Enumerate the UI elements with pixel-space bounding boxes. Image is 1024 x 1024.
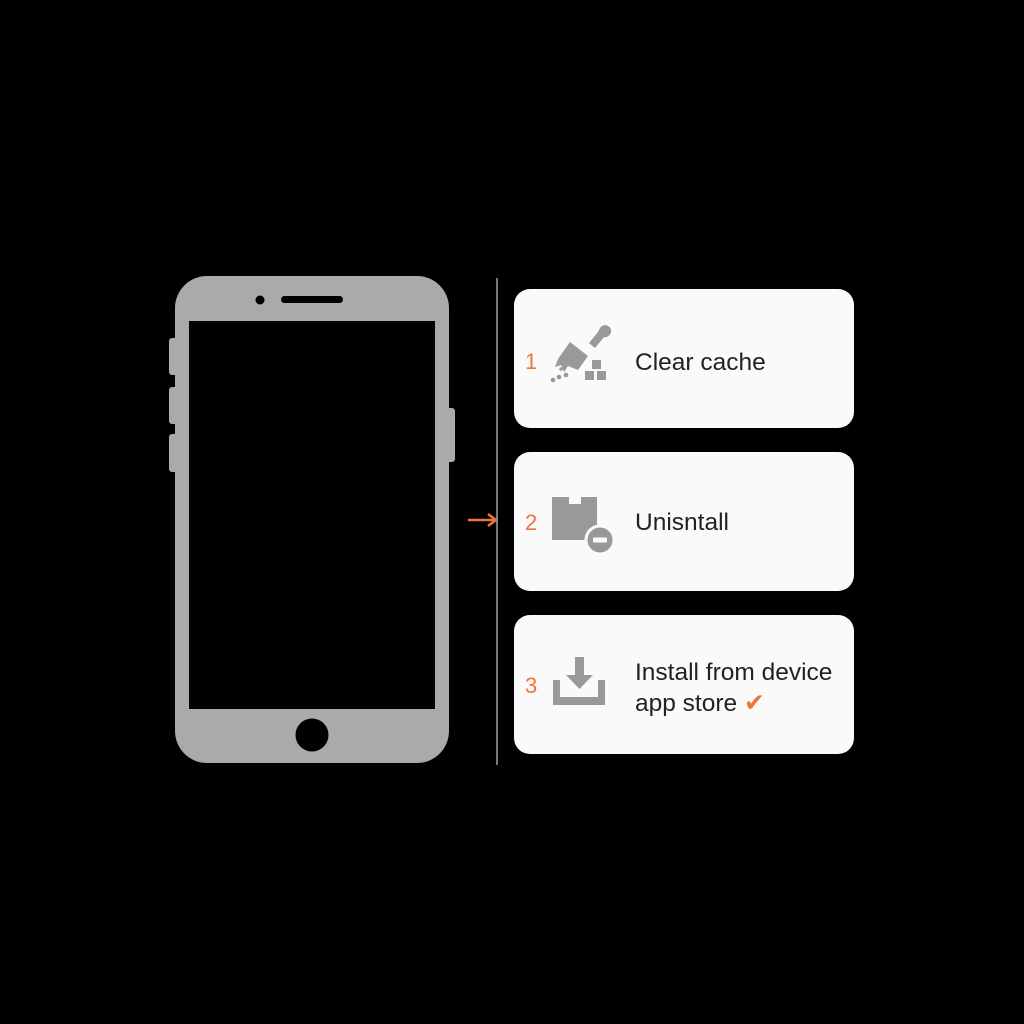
card 2: uninstall — [514, 452, 854, 591]
icon: download — [553, 657, 605, 705]
arrow — [468, 513, 498, 527]
icon: broom — [550, 325, 612, 382]
divider line — [496, 278, 498, 765]
icon: package minus — [552, 497, 612, 552]
card 1: clear cache — [514, 289, 854, 428]
card 3: install: 3 — [525, 673, 537, 698]
card 3: install: app store ✔ — [635, 689, 765, 717]
card 2: uninstall: 2 — [525, 510, 537, 535]
card 2: uninstall: Unisntall — [635, 509, 729, 536]
card 3: install: Install from device — [635, 659, 832, 686]
card 1: clear cache: Clear cache — [635, 349, 766, 376]
card 1: clear cache: 1 — [525, 349, 537, 374]
card 3: install — [514, 615, 854, 754]
